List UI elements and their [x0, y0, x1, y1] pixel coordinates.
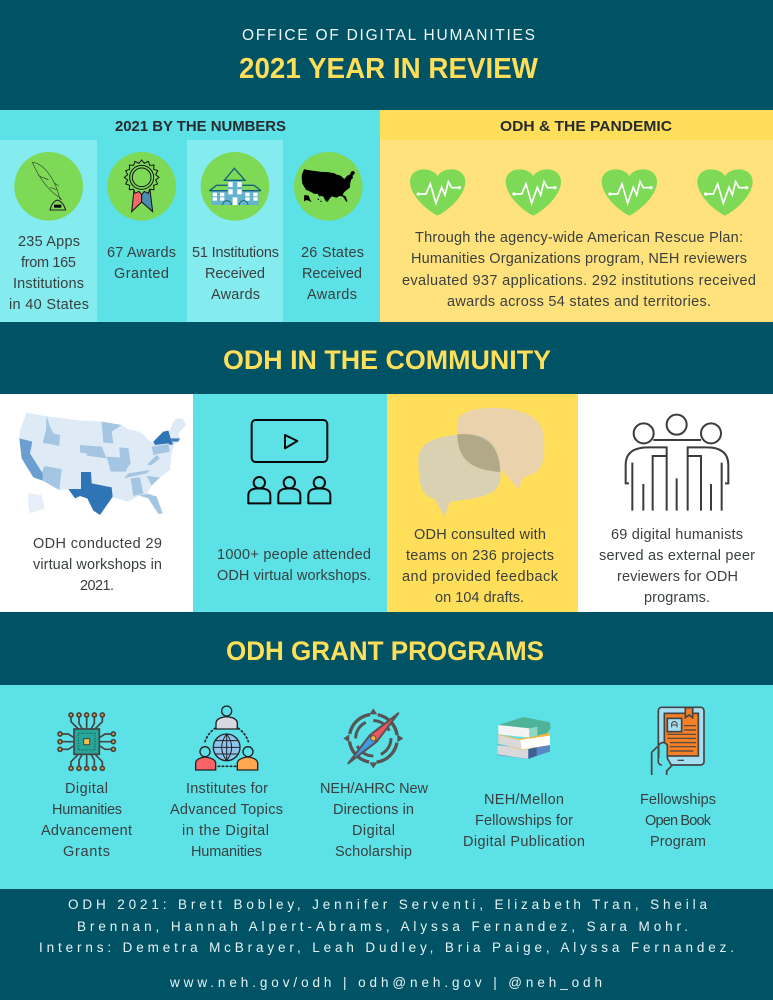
icon: circuit chip: [58, 713, 115, 770]
text: numbers captions: 51 Institutions: [192, 245, 279, 261]
chart: US workshop map: [19, 413, 186, 515]
icon: heart monitors: [410, 169, 753, 216]
text: attendance caption: ODH virtual workshops.: [217, 568, 371, 584]
text: consultations caption: and provided feedback: [402, 569, 559, 585]
icon: award ribbon: [107, 152, 176, 221]
text: consultations caption: [402, 527, 559, 606]
icon: video screen and audience: [248, 420, 330, 503]
text: workshops caption: 2021.: [80, 578, 114, 594]
heading: community: ODH IN THE COMMUNITY: [223, 345, 551, 375]
text: pandemic paragraph: Through the agency-wide American Rescue Plan:: [415, 230, 743, 246]
icon: black US map: [294, 152, 363, 221]
text: numbers captions: Received: [302, 266, 362, 282]
icon: stack of books: [497, 717, 551, 759]
text: grant captions: Advanced Topics: [170, 802, 283, 818]
header: OFFICE OF DIGITAL HUMANITIES: [242, 27, 535, 44]
footer credits: Interns: Demetra McBrayer, Leah Dudley, Bria Paige, Alyssa Fernandez.: [39, 940, 734, 955]
text: grant captions: Grants: [63, 844, 110, 860]
icon: speech bubbles: [418, 408, 544, 517]
footer credits: Brennan, Hannah Alpert-Abrams, Alyssa Fernandez, Sara Mohr.: [77, 919, 688, 934]
text: consultations caption: teams on 236 projects: [406, 548, 554, 564]
text: consultations caption: ODH consulted with: [414, 527, 546, 543]
icon: e-reader in hand: [652, 707, 704, 775]
text: reviewers caption: programs.: [644, 590, 710, 606]
header: 2021 YEAR IN REVIEW: [239, 53, 539, 85]
icon: institution building: [201, 152, 269, 221]
text: numbers captions: 67 Awards: [107, 245, 176, 261]
footer credits: [39, 897, 734, 990]
text: numbers captions: Granted: [114, 266, 169, 282]
text: consultations caption: on 104 drafts.: [435, 590, 524, 606]
panel: workshops map: [0, 394, 193, 612]
text: grant captions: [41, 781, 716, 860]
panel: 2021 by the numbers: [0, 110, 380, 322]
text: numbers captions: [9, 234, 364, 313]
panel: peer reviewers: [578, 394, 773, 612]
text: grant captions: in the Digital: [182, 823, 269, 839]
text: grant captions: Fellowships: [640, 792, 716, 808]
text: grant captions: Fellowships for: [475, 813, 573, 829]
text: numbers captions: Institutions: [13, 276, 84, 292]
text: grant captions: Digital: [65, 781, 108, 797]
text: reviewers caption: [599, 527, 755, 606]
text: workshops caption: ODH conducted 29: [33, 536, 162, 552]
text: grant captions: Scholarship: [335, 844, 412, 860]
text: reviewers caption: reviewers for ODH: [617, 569, 738, 585]
panel: consultations: [387, 394, 578, 612]
heading: pandemic: ODH & THE PANDEMIC: [500, 118, 672, 135]
text: grant captions: Program: [650, 834, 706, 850]
text: grant captions: Humanities: [191, 844, 262, 860]
text: grant captions: Directions in: [333, 802, 414, 818]
icon: quill: [14, 152, 83, 221]
text: numbers captions: in 40 States: [9, 297, 89, 313]
text: reviewers caption: 69 digital humanists: [611, 527, 743, 543]
icon: three people: [626, 415, 728, 511]
panel: attendance: [193, 394, 387, 612]
text: numbers captions: 235 Apps: [18, 234, 80, 250]
text: numbers captions: Awards: [211, 287, 260, 303]
text: numbers captions: Received: [205, 266, 265, 282]
text: pandemic paragraph: Humanities Organizations program, NEH reviewers: [411, 251, 747, 267]
text: grant captions: Advancement: [41, 823, 132, 839]
panel: ODH and the pandemic: [380, 110, 773, 322]
text: pandemic paragraph: evaluated 937 applications. 292 institutions received: [402, 273, 756, 289]
text: grant captions: Institutes for: [186, 781, 268, 797]
footer credits: www.neh.gov/odh | odh@neh.gov | @neh_odh: [169, 975, 602, 990]
icon: compass: [343, 708, 403, 768]
text: grant captions: Digital: [352, 823, 395, 839]
text: pandemic paragraph: awards across 54 states and territories.: [447, 294, 711, 310]
panel: grant programs: [0, 685, 773, 889]
text: workshops caption: [33, 536, 162, 594]
text: reviewers caption: served as external peer: [599, 548, 755, 564]
text: grant captions: Open Book: [645, 813, 712, 829]
icon: people around globe: [196, 706, 258, 770]
heading: by the numbers: 2021 BY THE NUMBERS: [115, 118, 286, 135]
text: workshops caption: virtual workshops in: [33, 557, 162, 573]
text: pandemic paragraph: [402, 230, 756, 310]
text: attendance caption: [217, 547, 371, 584]
text: grant captions: NEH/AHRC New: [320, 781, 429, 797]
text: numbers captions: from 165: [21, 255, 76, 271]
header: [239, 27, 539, 85]
text: attendance caption: 1000+ people attended: [217, 547, 371, 563]
text: grant captions: Digital Publication: [463, 834, 585, 850]
text: grant captions: Humanities: [52, 802, 122, 818]
text: grant captions: NEH/Mellon: [484, 792, 564, 808]
text: numbers captions: Awards: [307, 287, 357, 303]
heading: grant programs: ODH GRANT PROGRAMS: [226, 636, 544, 666]
text: numbers captions: 26 States: [301, 245, 364, 261]
footer credits: ODH 2021: Brett Bobley, Jennifer Serventi, Elizabeth Tran, Sheila: [68, 897, 707, 912]
